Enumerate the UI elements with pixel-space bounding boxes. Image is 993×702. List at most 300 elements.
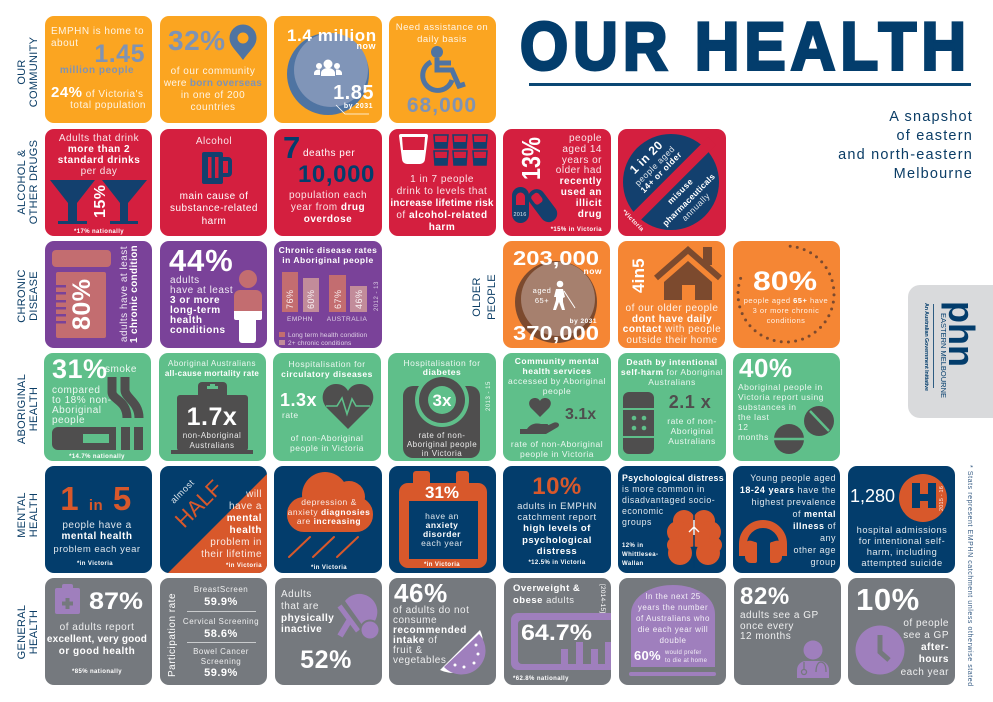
panel: population 1.45 million: million people — [60, 65, 134, 76]
section label: aboriginal health — [16, 374, 40, 444]
subtitle: of eastern — [896, 128, 973, 144]
panel: misuse pharmaceuticals: *Victoria — [621, 209, 645, 233]
icon: population circle: aged — [533, 286, 551, 295]
panel: intentional self-harm — [618, 353, 726, 461]
panel: 1 in 7: of alcohol-related — [396, 210, 488, 221]
panel: overweight and obese: 64.7% — [521, 620, 592, 645]
panel: physically inactive: that are — [281, 601, 319, 612]
panel: fruit and vegetables: vegetables — [393, 655, 446, 666]
panel: need assistance: 68,000 — [407, 94, 477, 117]
panel: population 1.45 million: 24% of Victoria's — [51, 84, 144, 101]
panel: see a GP: once every — [740, 621, 794, 632]
panel: standard drinks: per day — [81, 166, 117, 177]
panel: misuse pharmaceuticals: 14+ or older — [638, 149, 684, 195]
panel: hospital admissions: for intentional self- — [859, 536, 945, 546]
panel: older people population: 370,000 — [513, 323, 599, 345]
panel: standard drinks: Adults that drink — [59, 133, 140, 144]
panel: intentional self-harm: Aboriginal — [671, 426, 713, 436]
panel: hospital admissions: harm, including — [867, 547, 937, 557]
panel: circulatory diseases: 1.3x — [280, 390, 317, 410]
panel: illicit drug use: drug — [578, 209, 602, 220]
panel: young people: illness of — [793, 521, 836, 531]
bar chart: 67% — [333, 289, 343, 309]
panel: 80 percent chronic condition: adults have at least — [119, 246, 130, 342]
panel: all-cause mortality: non-Aboriginal — [183, 431, 241, 440]
panel: 44 percent long-term: 44% — [169, 243, 233, 278]
panel: diabetes: Hospitalisation for — [403, 358, 481, 368]
panel: illicit drug use: *15% in Victoria — [551, 227, 602, 233]
panel: misuse pharmaceuticals: pharmaceuticals — [660, 171, 717, 228]
icon: clock — [856, 626, 904, 674]
panel: 1 in 7 — [389, 129, 496, 236]
icon: medical briefcase — [171, 382, 253, 454]
panel: almost half: HALF — [170, 475, 227, 533]
bar chart: 2012 - 13 — [374, 281, 380, 311]
panel: population 1.45 million: total population — [70, 100, 146, 111]
icon: headstone — [629, 585, 716, 676]
section label: chronic disease: DISEASE — [28, 271, 40, 321]
icon: rain cloud — [287, 472, 373, 557]
panel: 1 in 5: problem each year — [53, 544, 141, 555]
panel: 44 percent long-term: long-term — [170, 305, 221, 316]
panel: overweight and obese: [2014-15] — [599, 584, 606, 613]
panel: intentional self-harm: Australians — [648, 377, 696, 387]
section label: mental health: MENTAL — [16, 492, 28, 538]
panel: born overseas: countries — [190, 102, 236, 113]
subtitle — [838, 109, 973, 182]
panel: born overseas: 32% — [168, 25, 226, 56]
panel: diabetes: Aboriginal people — [407, 440, 477, 449]
logo: phn eastern melbourne: phn — [941, 301, 982, 367]
panel: 4 in 5 older people: of our older people — [626, 303, 718, 314]
panel: population 1.45 million: EMPHN is home to — [51, 26, 144, 37]
panel: all-cause mortality: Aboriginal Australians — [168, 359, 256, 368]
panel: smoking: people — [52, 415, 85, 426]
panel: intentional self-harm: 2.1 x — [669, 392, 711, 412]
panel: physically inactive: Adults — [281, 589, 312, 600]
panel: physically inactive — [275, 578, 382, 685]
section label: mental health — [16, 492, 40, 538]
section label: older people: PEOPLE — [486, 274, 498, 320]
panel: substance use 40 percent: the last — [738, 412, 770, 422]
panel: psychological distress 10 percent: *12.5% in Victoria — [528, 560, 586, 566]
panel: intentional self-harm: Death by intentional — [626, 357, 718, 367]
panel: see a GP: 82% — [740, 583, 790, 610]
panel: disadvantaged groups: Wallan — [622, 561, 644, 567]
panel: 80 percent chronic condition: 1 chronic condition — [129, 245, 140, 343]
section label: older people — [471, 274, 498, 320]
panel: after-hours GP: each year — [901, 667, 949, 678]
panel: young people: highest prevalence — [751, 497, 836, 507]
panel: need assistance — [389, 16, 496, 123]
panel: fruit and vegetables — [389, 578, 496, 685]
icon: diabetes monitor — [403, 373, 480, 458]
section label: our community: COMMUNITY — [28, 36, 40, 107]
panel: population growth: by 2031 — [344, 103, 373, 110]
panel: after-hours GP — [848, 578, 955, 685]
logo: phn eastern melbourne: An Australian Government Initiative — [923, 303, 929, 391]
panel: disadvantaged groups: is more common in — [622, 484, 705, 494]
panel: 4 in 5 older people: outside their home — [626, 335, 718, 346]
panel: all-cause mortality: all-cause mortality rate — [165, 369, 259, 378]
panel: see a GP: 12 months — [740, 631, 791, 642]
panel: 80 percent older chronic: 80% — [753, 266, 817, 296]
panel: 44 percent long-term: health — [170, 315, 202, 326]
panel: community mental health: Community mental — [515, 356, 599, 366]
panel: standard drinks: standard drinks — [58, 155, 140, 166]
section label: our community: OUR — [16, 59, 28, 85]
icon: population circle — [515, 261, 597, 343]
panel: dying at home: years the number — [638, 603, 708, 612]
panel: population 1.45 million: about — [51, 38, 79, 49]
panel: disadvantaged groups: disadvantaged socio- — [622, 495, 715, 505]
panel: participation rate: 58.6% — [204, 628, 238, 640]
panel: alcohol: harm — [202, 216, 226, 227]
icon: house — [656, 247, 720, 300]
panel: smoking — [44, 353, 151, 461]
bar chart: 76% — [285, 289, 295, 309]
title: OUR HEALTH — [520, 8, 971, 84]
icon: no sign — [623, 134, 719, 230]
panel: participation rate: Screening — [201, 657, 241, 666]
section label: mental health: HEALTH — [28, 493, 40, 537]
section label: chronic disease — [16, 269, 40, 323]
chart legend — [279, 332, 367, 347]
panel: anxiety diagnoses: are increasing — [297, 516, 361, 526]
panel: disadvantaged groups: Psychological distress — [622, 473, 724, 483]
panel: self-rated health: excellent, very good — [47, 634, 147, 645]
icon: heart in hand — [520, 398, 559, 434]
panel: dying at home: would prefer — [664, 650, 702, 656]
icon: dotted ring — [738, 246, 834, 342]
panel: almost half: mental — [227, 513, 262, 524]
icon: cigarette — [52, 377, 143, 450]
panel: circulatory diseases: people in Victoria — [290, 443, 364, 453]
panel: after-hours GP: see a GP — [903, 630, 949, 641]
section label: general health: GENERAL — [16, 605, 28, 659]
panel: diabetes: diabetes — [423, 367, 461, 377]
panel: born overseas: were born overseas — [163, 78, 262, 89]
panel: dying at home: to die at home — [665, 658, 708, 664]
icon: population circle: 65+ — [535, 296, 549, 305]
panel: need assistance: daily basis — [417, 34, 467, 45]
panel: see a GP: adults see a GP — [740, 610, 819, 621]
panel: standard drinks: *17% nationally — [74, 229, 124, 235]
panel: hospital admissions: attempted suicide — [861, 558, 943, 568]
section label: alcohol and other drugs — [16, 140, 40, 224]
icon: capsules: 2016 — [513, 212, 527, 218]
panel: anxiety disorder: 31% — [425, 483, 459, 502]
panel: participation rate: BreastScreen — [194, 585, 248, 594]
panel: young people: group — [810, 557, 836, 567]
panel: anxiety disorder: *in Victoria — [424, 562, 460, 568]
panel: 80 percent older chronic — [733, 241, 840, 348]
panel: older people population: 203,000 — [513, 248, 599, 270]
bar chart: EMPHN — [287, 316, 313, 323]
panel: dying at home: In the next 25 — [645, 592, 701, 601]
panel: community mental health: rate of non-Aboriginal — [511, 439, 603, 449]
icon: bandage — [623, 392, 654, 454]
panel: physically inactive: inactive — [281, 624, 322, 635]
panel: overdose deaths: 7 — [283, 130, 301, 165]
logo: phn eastern melbourne — [908, 285, 993, 418]
section label: alcohol and other drugs: ALCOHOL & — [16, 149, 28, 215]
subtitle: A snapshot — [889, 109, 973, 125]
panel: 80 percent chronic condition: 80% — [68, 278, 96, 330]
panel: 80 percent older chronic: conditions — [767, 316, 805, 325]
panel: illicit drug use: years or — [562, 155, 602, 166]
panel: self-rated health: of adults report — [60, 622, 134, 633]
panel: all-cause mortality — [159, 353, 266, 461]
panel: anxiety disorder: anxiety — [426, 520, 458, 530]
panel: 4 in 5 older people: contact with people — [623, 324, 721, 335]
panel: illicit drug use: people — [569, 133, 602, 144]
bar chart: AUSTRALIA — [327, 316, 367, 323]
panel: overdose deaths — [274, 129, 382, 236]
panel: intentional self-harm: rate of non- — [667, 416, 717, 426]
panel: need assistance: Need assistance on — [396, 22, 488, 33]
subtitle: Melbourne — [894, 166, 973, 182]
panel: participation rate: Cervical Screening — [183, 617, 259, 626]
panel: intentional self-harm: self-harm for Aboriginal — [621, 367, 723, 377]
panel: substance use 40 percent — [733, 353, 840, 461]
section label: aboriginal health: HEALTH — [28, 387, 40, 431]
panel: hospital admissions — [848, 466, 955, 573]
panel: chronic disease rates bar chart: in Aboriginal people — [282, 255, 374, 265]
panel: anxiety disorder — [389, 466, 496, 573]
panel: older people population: by 2031 — [570, 318, 597, 325]
panel: circulatory diseases — [273, 353, 381, 461]
panel: psychological distress 10 percent: catchment report — [517, 512, 597, 523]
panel: see a GP — [734, 578, 841, 685]
icon: population circle — [287, 33, 369, 115]
panel: diabetes: in Victoria — [422, 449, 462, 458]
panel: alcohol: substance-related — [170, 203, 258, 214]
panel: self-rated health: 87% — [89, 588, 143, 615]
panel: community mental health — [503, 353, 611, 461]
panel: fruit and vegetables: consume — [393, 615, 437, 626]
panel: misuse pharmaceuticals — [617, 127, 726, 236]
panel: disadvantaged groups: groups — [622, 517, 652, 527]
panel: population growth — [274, 16, 382, 123]
icon: hospital H: 2015 - 16 — [939, 486, 945, 511]
panel: smoking: Aboriginal — [52, 405, 101, 416]
panel: overweight and obese: *62.8% nationally — [513, 676, 569, 682]
panel: smoking: compared — [52, 385, 100, 396]
panel: fruit and vegetables: of adults do not — [393, 605, 469, 616]
panel: born overseas: of our community — [171, 66, 255, 77]
panel: 80 percent older chronic: people aged 65+ have — [744, 296, 828, 305]
panel: anxiety disorder: disorder — [423, 529, 461, 539]
panel: smoking: smoke — [105, 364, 137, 375]
panel: overdose deaths: overdose — [304, 214, 352, 225]
panel: 44 percent long-term: 3 or more — [170, 295, 220, 306]
panel: 1 in 7: 1 in 7 people — [410, 174, 474, 185]
panel: community mental health: people in Victoria — [520, 449, 594, 459]
panel: substance use 40 percent: 12 — [738, 422, 748, 432]
panel: almost half: their lifetime — [201, 549, 262, 560]
panel: population growth: 1.4 million — [287, 26, 377, 45]
icon: watermelon — [440, 630, 486, 675]
panel: all-cause mortality: Australians — [189, 441, 235, 450]
panel: community mental health: accessed by Aboriginal — [508, 376, 606, 386]
icon: martini glasses — [50, 180, 147, 224]
panel: psychological distress 10 percent: adults in EMPHN — [517, 501, 597, 512]
panel: psychological distress 10 percent: distress — [537, 546, 577, 557]
panel: all-cause mortality: 1.7x — [187, 403, 237, 431]
panel: smoking: to 18% non- — [52, 395, 111, 406]
panel: illicit drug use: illicit — [576, 198, 602, 209]
panel: misuse pharmaceuticals: annually — [680, 190, 712, 223]
icon: pill bottle — [52, 250, 111, 338]
panel: participation rate: 59.9% — [204, 667, 238, 679]
panel: fruit and vegetables: 46% — [394, 578, 448, 608]
panel: population 1.45 million: 1.45 — [94, 40, 145, 68]
panel: participation rate: 59.9% — [204, 596, 238, 608]
panel: community mental health: 3.1x — [565, 406, 596, 423]
panel: dying at home: of Australians who — [636, 614, 710, 623]
icon: table tennis paddle — [340, 594, 380, 640]
panel: anxiety disorder: have an — [425, 511, 459, 521]
panel: young people — [733, 466, 840, 573]
panel: young people: 18-24 years have the — [740, 485, 836, 495]
panel: misuse pharmaceuticals: 1 in 20 — [627, 138, 666, 177]
panel: overweight and obese — [504, 578, 611, 685]
panel: self-rated health — [45, 578, 152, 685]
icon: beer mug — [202, 152, 230, 184]
panel: alcohol — [160, 129, 267, 236]
section label: aboriginal health: ABORIGINAL — [16, 374, 28, 444]
panel: 1 in 7: harm — [429, 222, 455, 233]
section label: general health: HEALTH — [28, 610, 40, 654]
panel: young people: Young people aged — [750, 473, 836, 483]
panel: dying at home: double — [659, 636, 687, 645]
bar chart: 60% — [306, 289, 316, 309]
panel: standard drinks: 15% — [92, 184, 109, 218]
icon: location pin — [230, 24, 256, 60]
panel: anxiety diagnoses: anxiety diagnosies — [288, 507, 370, 517]
panel: community mental health: people — [543, 386, 571, 396]
panel: substance use 40 percent: 40% — [739, 353, 793, 383]
panel: circulatory diseases: circulatory diseases — [281, 369, 373, 379]
icon: person — [234, 270, 262, 343]
panel: population 1.45 million — [45, 16, 152, 123]
icon: bathroom scale — [511, 613, 611, 670]
section label: chronic disease: CHRONIC — [16, 269, 28, 323]
panel: dying at home: 60% — [634, 648, 661, 663]
panel: diabetes: rate of non- — [419, 431, 465, 440]
panel: self-rated health: *85% nationally — [72, 669, 122, 675]
panel: standard drinks — [45, 129, 152, 236]
panel: anxiety diagnoses: depression & — [301, 497, 357, 507]
chart legend: Long term health condition — [288, 332, 367, 339]
panel: misuse pharmaceuticals: people aged — [633, 144, 677, 188]
panel: substance use 40 percent: Aboriginal people in — [738, 382, 823, 392]
panel: psychological distress 10 percent — [503, 466, 611, 573]
panel: illicit drug use — [503, 129, 611, 236]
panel: fruit and vegetables: fruit & — [393, 645, 423, 656]
panel: dying at home: die each year will — [638, 625, 708, 634]
panel: after-hours GP: after- — [921, 642, 949, 653]
panel: almost half: will — [245, 489, 262, 500]
panel: almost half: have a — [229, 501, 262, 512]
subtitle: and north-eastern — [838, 147, 973, 163]
panel: born overseas: in one of 200 — [181, 90, 245, 101]
panel: illicit drug use: recently — [560, 176, 602, 187]
bar chart — [282, 272, 380, 323]
icon: brain — [667, 510, 722, 568]
panel: community mental health: health services — [523, 366, 591, 376]
panel: participation rate: Participation rate — [167, 593, 178, 677]
panel: 1 in 7: drink to levels that — [397, 186, 487, 197]
panel: anxiety diagnoses: *in Victoria — [311, 565, 347, 571]
panel: physically inactive: physically — [281, 613, 334, 624]
panel: after-hours GP: of people — [903, 618, 949, 629]
panel: chronic disease rates bar chart: Chronic disease rates — [279, 245, 377, 255]
panel: circulatory diseases: Hospitalisation for — [288, 359, 366, 369]
panel: 44 percent long-term: adults — [170, 275, 200, 286]
icon: clipboard — [55, 584, 80, 614]
panel: after-hours GP: 10% — [856, 582, 920, 617]
panel: disadvantaged groups: economic — [622, 506, 664, 516]
panel: standard drinks: more than 2 — [68, 144, 130, 155]
panel: young people: any — [820, 533, 836, 543]
panel: 44 percent long-term: conditions — [170, 325, 226, 336]
panel: 1 in 5: mental health — [62, 531, 132, 542]
panel: almost half: problem in — [210, 537, 262, 548]
panel: illicit drug use: older had — [556, 165, 602, 176]
section label: our community — [16, 36, 40, 107]
panel: self-rated health: or good health — [59, 646, 135, 657]
panel: disadvantaged groups — [618, 466, 726, 573]
panel: psychological distress 10 percent: psychological — [522, 535, 592, 546]
panel: circulatory diseases: rate — [282, 410, 299, 420]
panel: 4 in 5 older people — [618, 241, 725, 348]
panel: overdose deaths: 10,000 — [298, 161, 375, 188]
panel: 4 in 5 older people: 4in5 — [629, 258, 648, 293]
panel: young people: of mental — [792, 509, 836, 519]
panel: older people population — [503, 241, 610, 348]
panel: circulatory diseases: of non-Aboriginal — [291, 433, 363, 443]
panel: overweight and obese: obese adults — [513, 595, 574, 606]
panel: psychological distress 10 percent: high levels of — [523, 523, 591, 534]
panel: anxiety disorder: each year — [421, 538, 463, 548]
panel: intentional self-harm: Australians — [668, 436, 716, 446]
icon: headphones — [743, 524, 783, 563]
panel: 1 in 5 — [45, 466, 152, 573]
panel: population growth: 1.85 — [333, 82, 374, 104]
panel: hospital admissions: 1,280 — [850, 486, 895, 506]
panel: population growth: now — [356, 41, 376, 51]
panel: 80 percent chronic condition — [45, 241, 152, 348]
panel: substance use 40 percent: Victoria report using — [738, 392, 824, 402]
panel: smoking: 31% — [52, 354, 108, 384]
panel: anxiety diagnoses — [274, 466, 382, 573]
panel: diabetes: 2013 - 15 — [486, 381, 492, 411]
panel: 1 in 7: increase lifetime risk — [390, 198, 494, 209]
panel: 4 in 5 older people: dont have daily — [632, 314, 712, 325]
chart legend: 2+ chronic conditions — [288, 340, 352, 347]
panel: participation rate: Bowel Cancer — [193, 647, 249, 656]
panel: almost half — [160, 466, 267, 573]
icon: wheelchair — [423, 46, 465, 90]
panel: overdose deaths: deaths per — [303, 148, 355, 159]
section label: general health — [16, 605, 40, 659]
panel: hospital admissions: hospital admissions — [857, 525, 947, 535]
panel: young people: other age — [793, 545, 836, 555]
footnote: * Stats represent EMPHN catchment unless otherwise stated — [966, 465, 973, 687]
panel: illicit drug use: aged 14 — [562, 144, 602, 155]
